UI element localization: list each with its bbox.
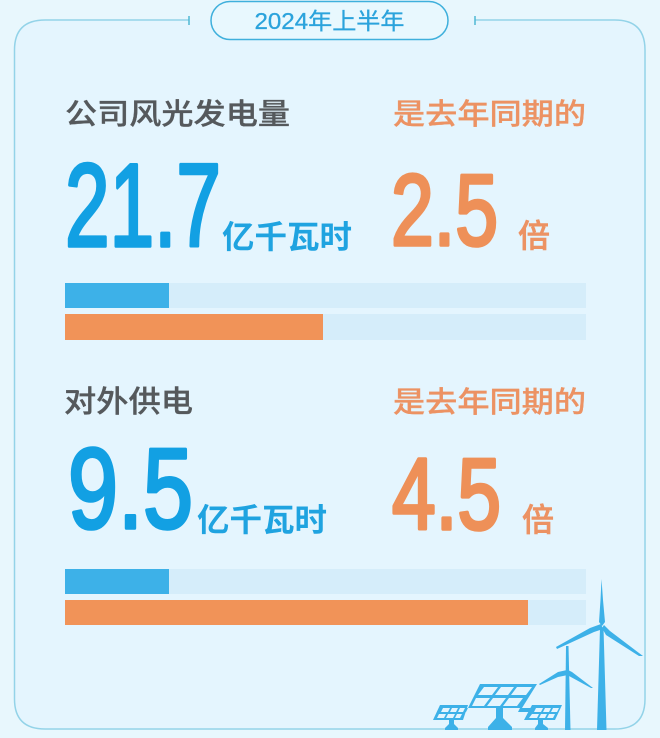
heading: compared with last year: 是去年同期的 (393, 386, 586, 419)
large turbine (556, 579, 643, 730)
bar chart: generation (65, 283, 586, 340)
central solar panel (449, 684, 537, 730)
heading: compared with last year: 是去年同期的 (393, 98, 586, 131)
unit: times: 倍 (518, 218, 550, 254)
value: 21.7: 21.7 (65, 140, 221, 272)
unit: 100 million kWh: 亿千瓦时 (197, 502, 327, 538)
icon: wind turbines and solar panels (433, 579, 643, 730)
value: 9.5: 9.5 (68, 426, 193, 553)
left solar panel (433, 705, 468, 720)
date pill: 2024年上半年 (254, 8, 404, 34)
unit: times: 倍 (522, 502, 554, 538)
bar chart: supply (65, 569, 586, 625)
unit: 100 million kWh: 亿千瓦时 (222, 219, 352, 255)
small turbine (539, 646, 593, 730)
date pill (211, 2, 448, 40)
panel cells (437, 687, 559, 718)
value: 4.5: 4.5 (392, 439, 501, 551)
heading: company wind and solar generation: 公司风光发电量 (65, 98, 290, 131)
heading: external power supply: 对外供电 (64, 386, 193, 419)
value: 2.5: 2.5 (391, 155, 498, 267)
right solar panel (524, 705, 562, 720)
